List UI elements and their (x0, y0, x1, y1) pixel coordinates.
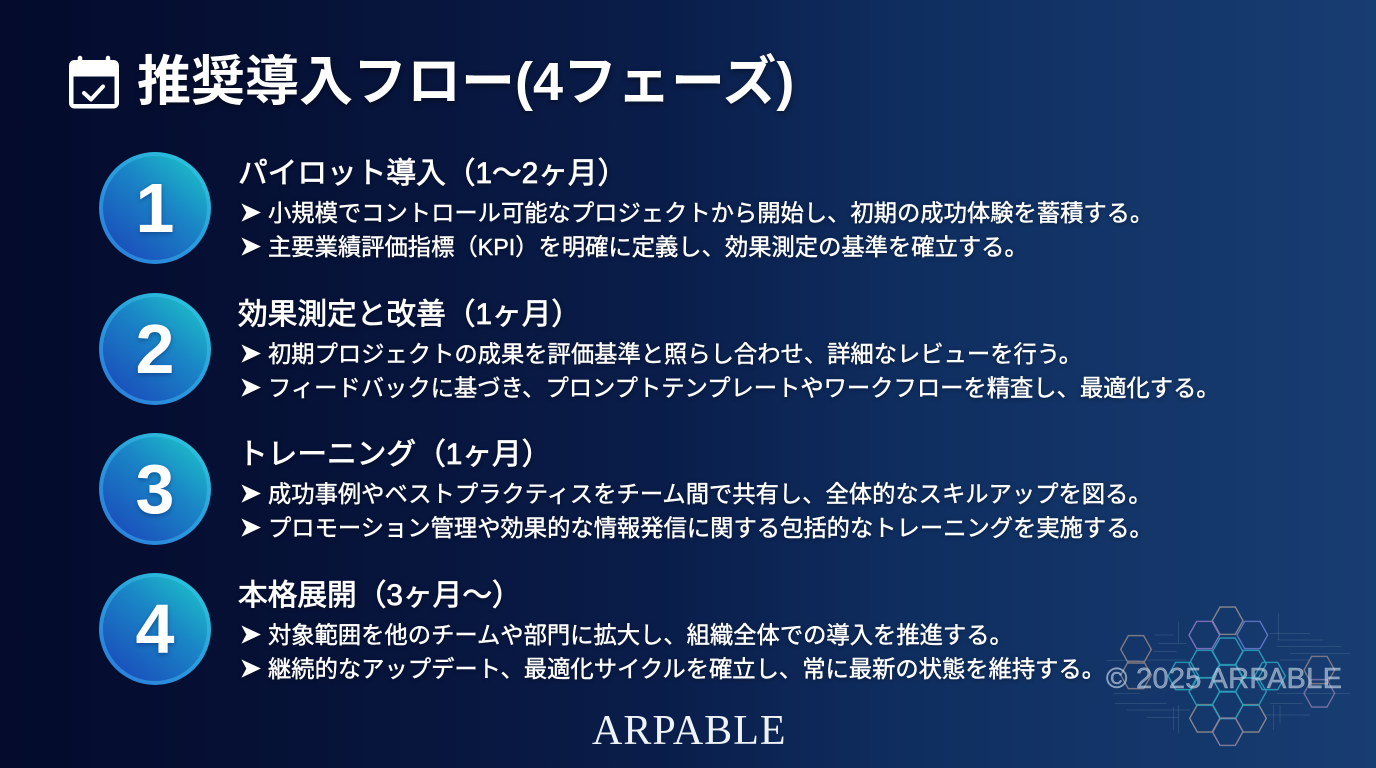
phase 1 badge: 1 (136, 169, 174, 247)
phase 1 bullet 2: ➤ (239, 231, 262, 261)
copyright: © 2025 ARPABLE (1106, 663, 1342, 695)
phase 3 bullet 2: ➤ (239, 512, 262, 542)
phase 3 bullet 1: ➤ (239, 478, 262, 508)
phase 2 heading: 効果測定と改善（1ヶ月） (238, 298, 581, 331)
title: 推奨導入フロー(4フェーズ) (137, 52, 794, 112)
phase 1 bullet 1: 小規模でコントロール可能なプロジェクトから開始し、初期の成功体験を蓄積する。 (268, 200, 1153, 226)
phase 2 bullet 2: フィードバックに基づき、プロンプトテンプレートやワークフローを精査し、最適化する。 (268, 375, 1220, 401)
phase 2 bullet 2: ➤ (239, 372, 262, 402)
phase 4 bullet 1: 対象範囲を他のチームや部門に拡大し、組織全体での導入を推進する。 (268, 622, 1013, 648)
phase 4 bullet 2: 継続的なアップデート、最適化サイクルを確立し、常に最新の状態を維持する。 (268, 656, 1105, 682)
logo: ARPABLE (592, 708, 787, 754)
phase 4 bullet 2: ➤ (239, 653, 262, 683)
phase 4 heading: 本格展開（3ヶ月〜） (238, 579, 522, 612)
phase 3 bullet 1: 成功事例やベストプラクティスをチーム間で共有し、全体的なスキルアップを図る。 (268, 481, 1152, 507)
phase 1 badge (99, 152, 211, 264)
phase 1 content (238, 157, 1153, 261)
phase 4 bullet 1: ➤ (239, 619, 262, 649)
phase 1 bullet 1: ➤ (239, 197, 262, 227)
phase 3 bullet 2: プロモーション管理や効果的な情報発信に関する包括的なトレーニングを実施する。 (268, 515, 1153, 541)
phase 4 badge: 4 (136, 590, 174, 668)
phase 2 badge: 2 (136, 310, 174, 388)
phase 4 badge (99, 573, 211, 685)
phase 3 heading: トレーニング（1ヶ月） (238, 438, 551, 471)
decoration: hexagon circuit graphic (1106, 606, 1350, 746)
phase 1 heading: パイロット導入（1〜2ヶ月） (238, 157, 627, 190)
phase 1 bullet 2: 主要業績評価指標（KPI）を明確に定義し、効果測定の基準を確立する。 (268, 234, 1028, 260)
phase 2 bullet 1: ➤ (239, 338, 262, 368)
phase 2 badge (99, 293, 211, 405)
icon: calendar with check (69, 56, 119, 108)
phase 2 bullet 1: 初期プロジェクトの成果を評価基準と照らし合わせ、詳細なレビューを行う。 (268, 341, 1082, 367)
phase 2 content (238, 298, 1220, 402)
phase 3 badge: 3 (136, 450, 174, 528)
phase 4 content (238, 579, 1105, 683)
phase 3 content (238, 438, 1153, 542)
phase 3 badge (99, 433, 211, 545)
